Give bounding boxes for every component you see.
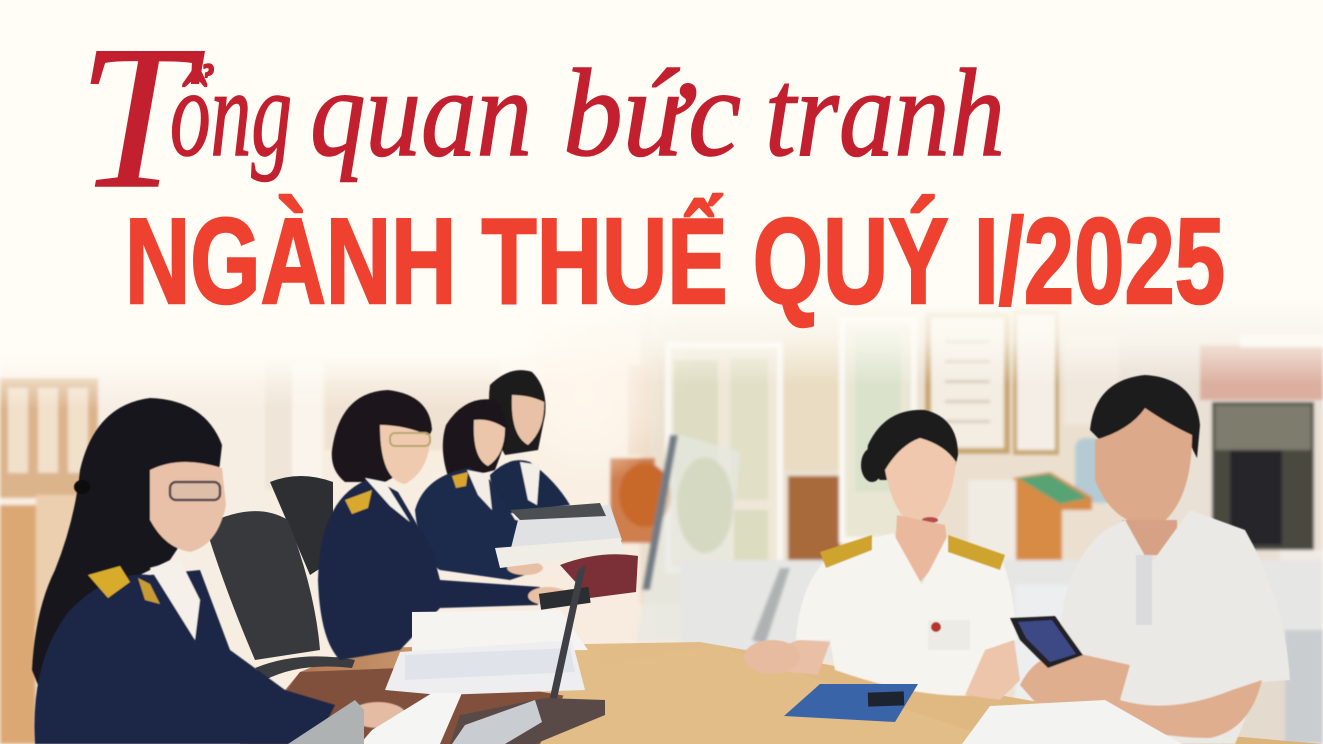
person: third staff woman: [415, 399, 564, 580]
paper stacks on desk: [385, 503, 625, 695]
title script line: ổng: [170, 45, 292, 183]
person: back staff woman: [489, 370, 570, 515]
photo: office background: [0, 300, 1323, 744]
title script line: [78, 4, 1005, 231]
chair: waiting side: [752, 568, 1323, 744]
brochure and documents on counter: [784, 684, 1182, 744]
loose paper and laptop on desk: [288, 565, 605, 744]
fade: left top photo: [0, 344, 524, 405]
info kiosk: [968, 472, 1092, 586]
glass doors: [668, 320, 914, 570]
counter back: [680, 560, 1323, 660]
title script line: bức: [563, 45, 741, 183]
notice boards: [925, 310, 1119, 455]
title script line: quan: [310, 45, 532, 183]
person: female officer in white: [744, 410, 1020, 700]
person: second staff woman: [318, 390, 568, 660]
main desk: [240, 642, 1323, 744]
fade of photo into title background: [0, 295, 1323, 385]
person: front staff woman: [32, 398, 406, 744]
phone on desk: [539, 554, 638, 610]
back wall right of staff: [610, 305, 1323, 605]
plant: [619, 457, 733, 553]
fade: seam between left and right photos: [500, 315, 670, 485]
wall panels behind staff: [98, 340, 650, 630]
glass screen partition: [636, 432, 740, 642]
cabinet: left wood panel: [0, 378, 100, 744]
right side room: [1075, 305, 1323, 605]
person: male citizen with phone: [1010, 375, 1290, 744]
chairs behind staff: [205, 476, 355, 680]
title script line: T: [78, 4, 205, 231]
title script line: tranh: [765, 45, 1005, 183]
